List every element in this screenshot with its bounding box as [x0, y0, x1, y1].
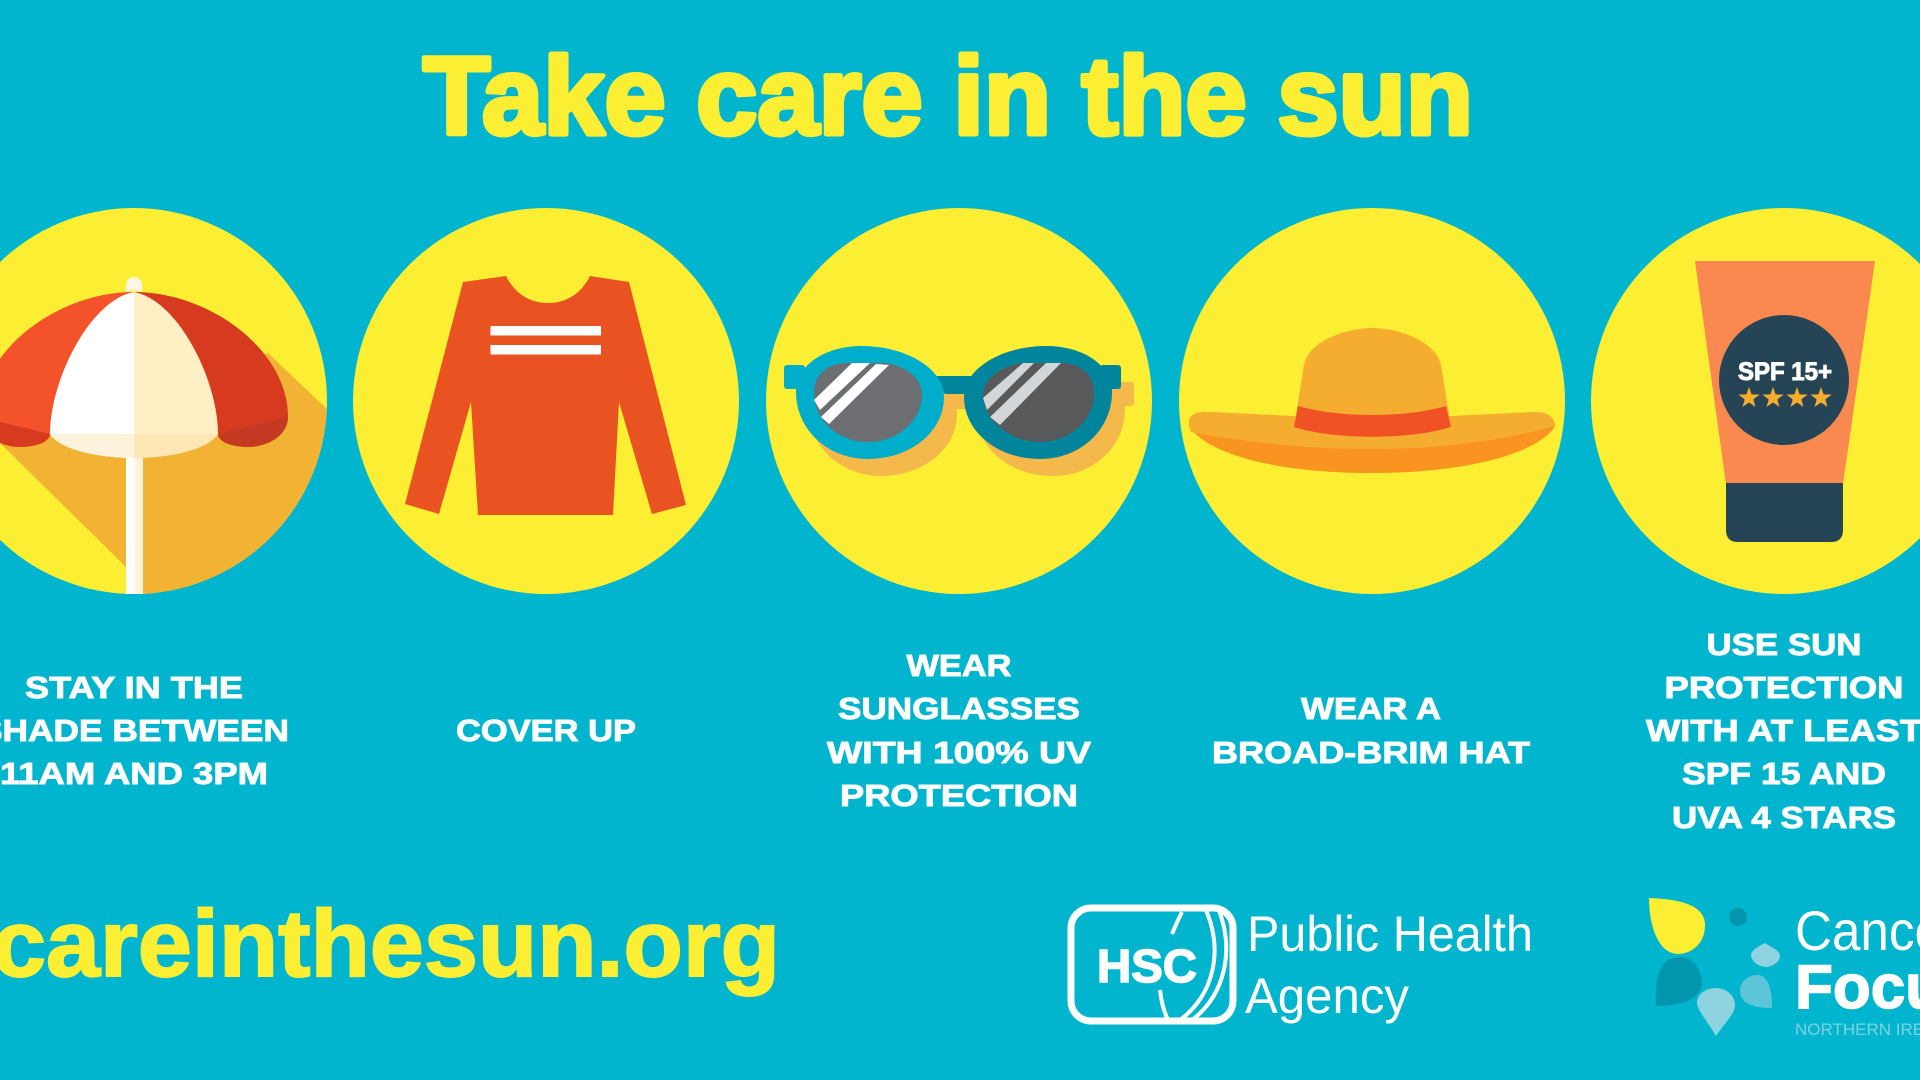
logo: HSC Public Health Agency: [1071, 906, 1533, 1024]
icon: beach umbrella: [0, 277, 288, 594]
HSC badge: HSC: [1097, 940, 1197, 992]
caption: hat: WEAR A: [1301, 691, 1441, 726]
icon: sunscreen tube: [1695, 261, 1875, 542]
SPF badge: [1719, 315, 1849, 445]
logo drops: [1649, 898, 1780, 1036]
caption: sunglasses: WEAR: [906, 648, 1012, 683]
caption: sun protection: WITH AT LEAST: [1646, 713, 1920, 748]
sunglasses left frame: [784, 346, 944, 459]
panel: shade icon: [0, 208, 330, 600]
caption: shade: STAY IN THE: [25, 670, 243, 705]
logo: Cancer Focus Northern Ireland: [1649, 898, 1920, 1039]
sunglasses shadow: [809, 363, 1134, 476]
caption: sun protection: PROTECTION: [1664, 670, 1904, 705]
panel: sunglasses icon: [766, 208, 1152, 594]
icon: broad-brim hat: [1189, 328, 1555, 473]
caption: sun protection: SPF 15 AND: [1682, 756, 1886, 791]
caption: cover up: COVER UP: [456, 713, 636, 748]
caption: hat: BROAD-BRIM HAT: [1212, 735, 1530, 770]
website url: careinthesun.org: [0, 891, 780, 997]
panel: sunscreen icon: [1591, 208, 1920, 594]
caption: sunglasses: WITH 100% UV: [827, 735, 1091, 770]
left lens: [814, 363, 922, 442]
caption: sunglasses: [827, 648, 1091, 813]
caption: sunglasses: SUNGLASSES: [838, 691, 1080, 726]
caption: sunglasses: PROTECTION: [840, 778, 1078, 813]
right lens: [983, 363, 1094, 442]
caption: sun protection: USE SUN: [1706, 627, 1862, 662]
caption: sun protection: UVA 4 STARS: [1672, 800, 1896, 835]
HSC badge: [1071, 908, 1233, 1021]
panel: hat icon: [1179, 208, 1565, 594]
icon: long-sleeve top: [405, 276, 686, 515]
agency name: Public Health: [1247, 906, 1533, 962]
sunglasses right frame: [932, 346, 1121, 459]
umbrella long shadow: [0, 353, 330, 600]
panel: cover up icon: [353, 208, 739, 594]
caption: shade: [0, 670, 289, 791]
caption: hat: [1212, 691, 1530, 770]
caption: sun protection: [1646, 627, 1920, 835]
top stripes: [490, 326, 601, 354]
title: Take care in the sun: [423, 35, 1473, 158]
SPF badge: SPF 15+: [1738, 358, 1832, 386]
logo: HSC Public Health Agency: Agency: [1245, 968, 1409, 1024]
caption: shade: 11AM AND 3PM: [0, 756, 268, 791]
